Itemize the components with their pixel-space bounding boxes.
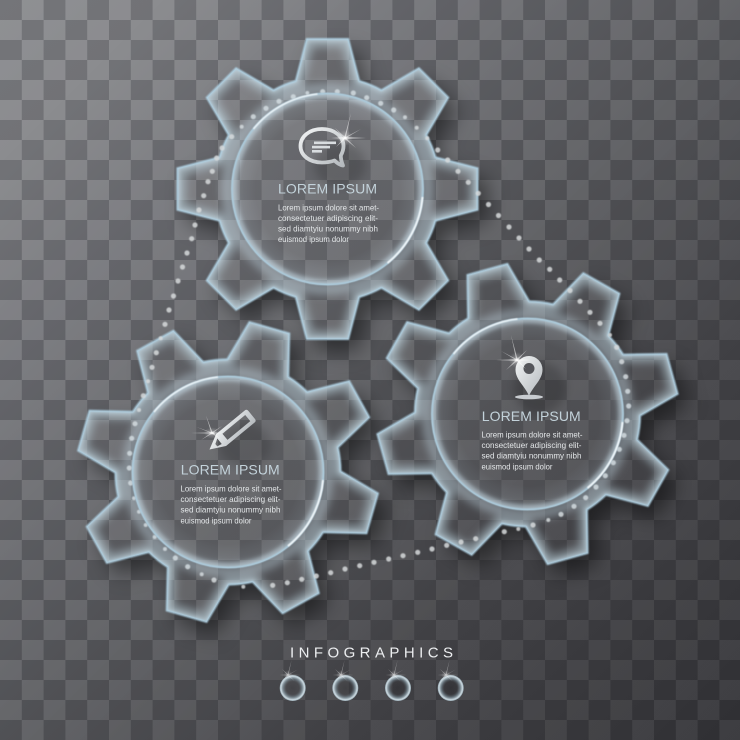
heading: LOREM IPSUM (482, 408, 581, 424)
icon: pencil (191, 409, 271, 467)
text block: Lorem ipsum dolore sit amet- (180, 484, 282, 494)
heading: LOREM IPSUM (278, 180, 377, 196)
text block: consectetuer adipiscing elit- (482, 440, 582, 450)
icon: speech bubble (300, 113, 366, 187)
panel: right gear content (428, 314, 628, 514)
text block: euismod ipsum dolor (180, 515, 252, 525)
text block: consectetuer adipiscing elit- (278, 213, 378, 223)
text block: consectetuer adipiscing elit- (180, 494, 281, 504)
icon: ring 1 (280, 660, 306, 701)
text block: euismod ipsum dolor (278, 234, 349, 244)
icon: ring 2 (332, 660, 358, 701)
icon: ring 4 (438, 660, 464, 701)
icon: map pin (496, 335, 566, 414)
heading: LOREM IPSUM (181, 461, 280, 477)
text block: Lorem ipsum dolore sit amet- (278, 202, 379, 212)
gear drop shadows (82, 43, 692, 638)
glass disc (428, 314, 628, 514)
text block: sed diamtyiu nonummy nibh (482, 450, 582, 460)
panel: top gear content (228, 89, 428, 289)
glass disc (128, 372, 328, 572)
glass disc (228, 89, 428, 289)
frame: right gear (343, 229, 712, 599)
icon: ring 3 (385, 660, 411, 701)
text block (278, 202, 379, 244)
frame: top gear (178, 39, 478, 339)
text block (180, 484, 282, 525)
dotted rounded-triangle path linking the gears (127, 89, 631, 589)
footer title: INFOGRAPHICS (290, 644, 453, 662)
text block (482, 430, 583, 471)
footer glass rings (280, 660, 464, 701)
panel: left gear content (128, 372, 328, 572)
text block: euismod ipsum dolor (482, 461, 553, 471)
text block: sed diamtyiu nonummy nibh (180, 505, 281, 515)
text block: Lorem ipsum dolore sit amet- (482, 430, 583, 440)
frame: left gear (42, 286, 414, 658)
text block: sed diamtyiu nonummy nibh (278, 224, 378, 234)
